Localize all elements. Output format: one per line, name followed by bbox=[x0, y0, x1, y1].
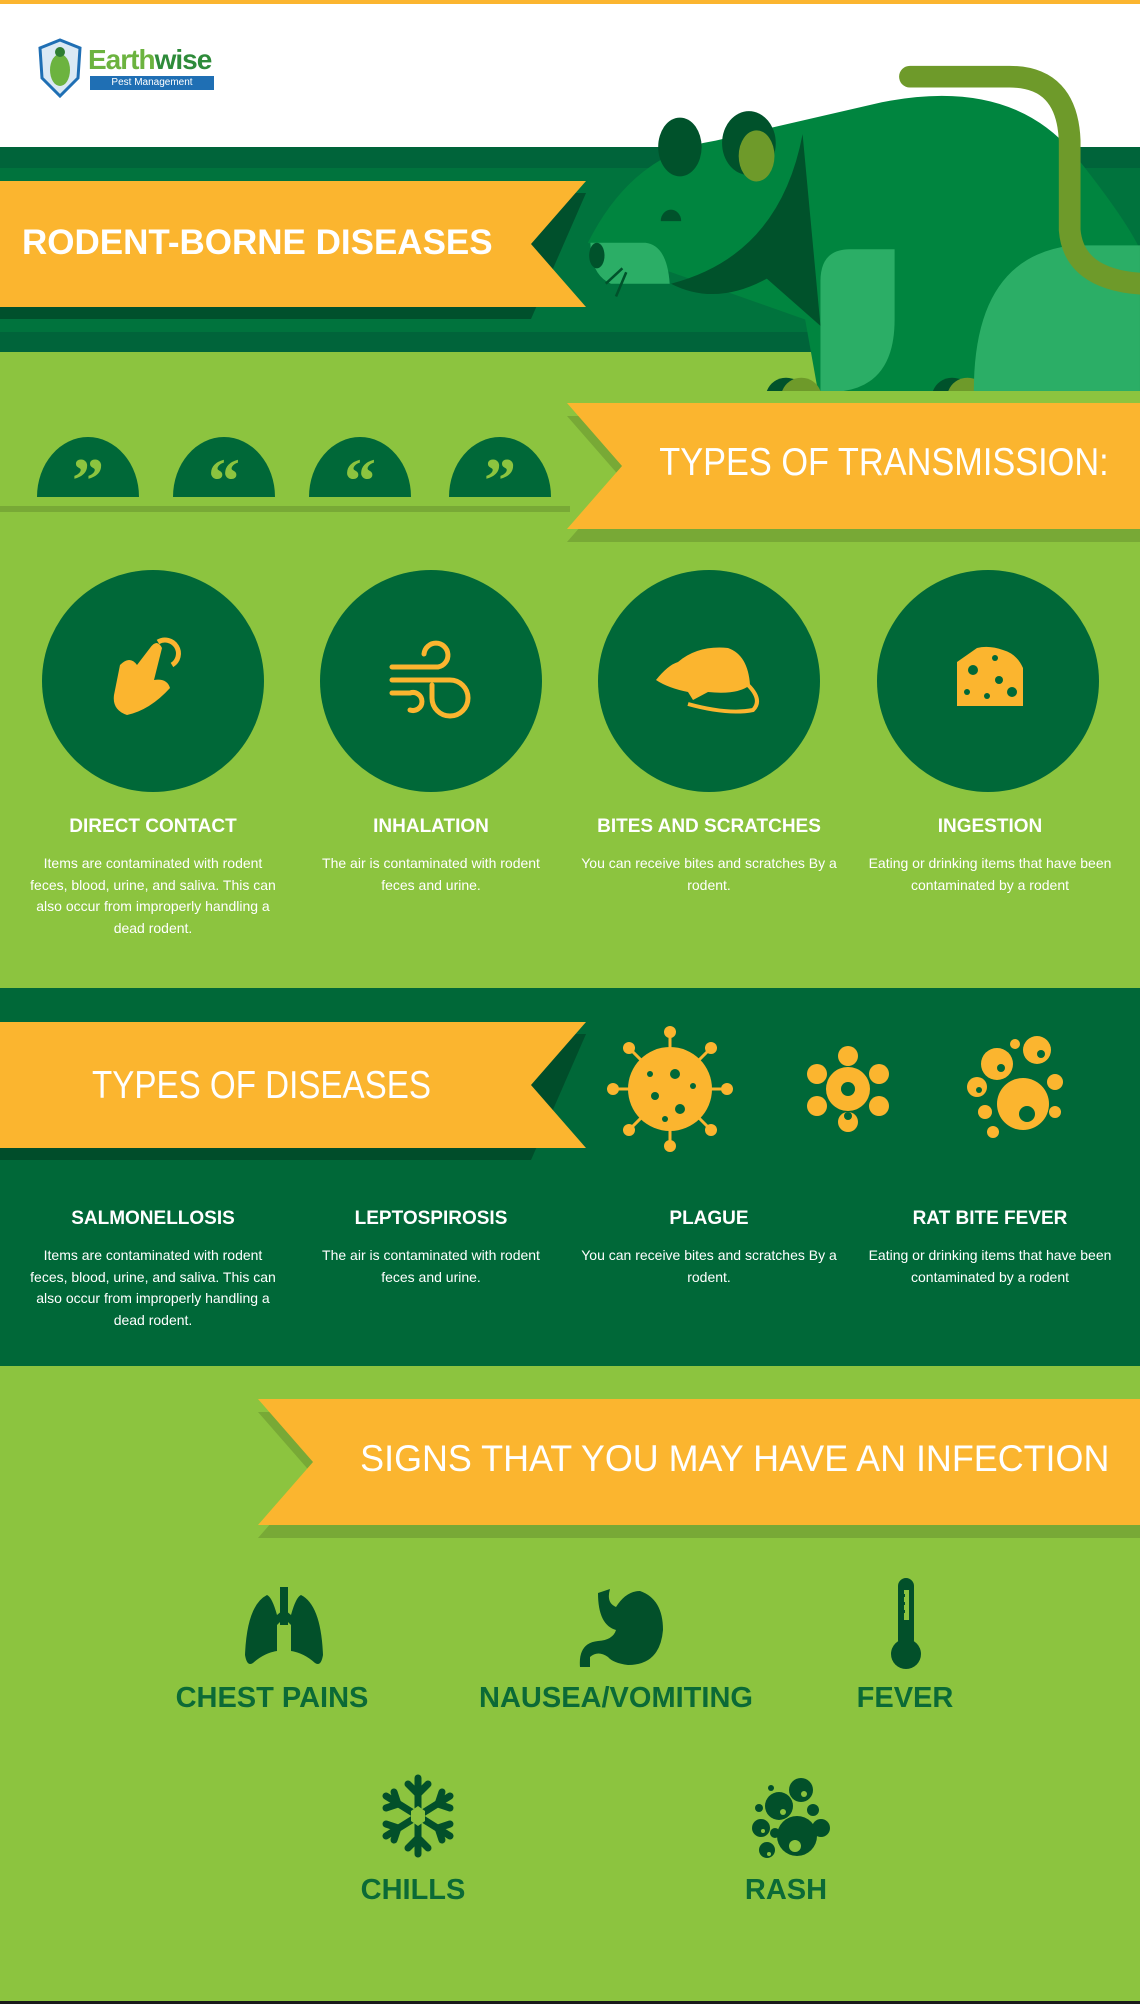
transmission: direct contact: Items are contaminated with rodent bbox=[44, 855, 262, 871]
diseases banner: TYPES OF DISEASES bbox=[92, 1064, 431, 1107]
transmission banner: TYPES OF TRANSMISSION: bbox=[660, 441, 1109, 484]
sign: rash: RASH bbox=[745, 1874, 827, 1906]
transmission: bites: rodent. bbox=[687, 877, 731, 893]
disease: leptospirosis: feces and urine. bbox=[381, 1269, 481, 1285]
disease: plague: PLAGUE bbox=[669, 1208, 749, 1229]
sign: nausea: NAUSEA/VOMITING bbox=[479, 1682, 753, 1714]
sign: nausea bbox=[479, 1589, 753, 1714]
logo bbox=[38, 38, 214, 98]
transmission: bites: You can receive bites and scratches By a bbox=[581, 855, 837, 871]
disease: salmonellosis: feces, blood, urine, and saliva. This can bbox=[30, 1269, 276, 1285]
transmission circles bbox=[42, 570, 1099, 792]
icon: virus 1 bbox=[607, 1026, 733, 1152]
disease: salmonellosis: SALMONELLOSIS bbox=[71, 1208, 235, 1229]
sign: chills bbox=[361, 1774, 465, 1906]
transmission: inhalation: feces and urine. bbox=[381, 877, 481, 893]
disease: leptospirosis: The air is contaminated with rodent bbox=[322, 1247, 540, 1263]
top white header bbox=[0, 0, 1140, 148]
disease: salmonellosis bbox=[30, 1208, 276, 1328]
disease: plague: rodent. bbox=[687, 1269, 731, 1285]
disease: salmonellosis: Items are contaminated with rodent bbox=[44, 1247, 262, 1263]
transmission: direct contact: feces, blood, urine, and saliva. This can bbox=[30, 877, 276, 893]
quote bubbles row bbox=[0, 437, 570, 512]
transmission: direct contact: DIRECT CONTACT bbox=[69, 816, 237, 837]
transmission: ingestion bbox=[869, 816, 1111, 893]
sign: chest pains: CHEST PAINS bbox=[176, 1682, 368, 1714]
disease: rat bite fever bbox=[869, 1208, 1111, 1285]
icon: hand bbox=[42, 570, 264, 792]
disease: leptospirosis: LEPTOSPIROSIS bbox=[355, 1208, 507, 1229]
transmission: direct contact: also occur from improperly handling a bbox=[36, 898, 270, 914]
signs banner bbox=[258, 1399, 1140, 1538]
transmission: direct contact bbox=[30, 816, 276, 936]
transmission: inhalation: INHALATION bbox=[373, 816, 489, 837]
disease: plague bbox=[581, 1208, 837, 1285]
sign: chest pains bbox=[176, 1587, 368, 1714]
transmission: ingestion: contaminated by a rodent bbox=[911, 877, 1069, 893]
signs banner: SIGNS THAT YOU MAY HAVE AN INFECTION bbox=[360, 1438, 1109, 1479]
disease: salmonellosis: also occur from improperly handling a bbox=[36, 1290, 270, 1306]
icon: rat bbox=[598, 570, 820, 792]
transmission: direct contact: dead rodent. bbox=[114, 920, 192, 936]
bubble 2 bbox=[173, 437, 275, 497]
disease: rat bite fever: contaminated by a rodent bbox=[911, 1269, 1069, 1285]
sign: fever: FEVER bbox=[857, 1682, 953, 1714]
disease: leptospirosis bbox=[322, 1208, 540, 1285]
diseases banner bbox=[0, 1022, 586, 1160]
transmission: inhalation: The air is contaminated with rodent bbox=[322, 855, 540, 871]
diseases section bbox=[0, 988, 1140, 1366]
title banner bbox=[0, 181, 586, 319]
sign: rash bbox=[745, 1778, 830, 1906]
icon: wind bbox=[320, 570, 542, 792]
icon: bubbles bbox=[967, 1036, 1063, 1138]
icon: virus 2 bbox=[807, 1046, 889, 1132]
disease: rat bite fever: RAT BITE FEVER bbox=[913, 1208, 1067, 1229]
icon: cheese bbox=[877, 570, 1099, 792]
sign: chills: CHILLS bbox=[361, 1874, 465, 1906]
transmission: bites: BITES AND SCRATCHES bbox=[597, 816, 821, 837]
bubble 3 bbox=[309, 437, 411, 497]
sign: fever bbox=[857, 1578, 953, 1714]
transmission: inhalation bbox=[322, 816, 540, 893]
logo: Pest Management bbox=[111, 77, 193, 88]
bubble 4 bbox=[449, 437, 551, 497]
transmission: ingestion: INGESTION bbox=[938, 816, 1042, 837]
disease: salmonellosis: dead rodent. bbox=[114, 1312, 192, 1328]
bubble 1 bbox=[37, 437, 139, 497]
bottom line bbox=[0, 2001, 1140, 2004]
disease: rat bite fever: Eating or drinking items that have been bbox=[869, 1247, 1111, 1263]
rat illustration bbox=[588, 66, 1140, 391]
transmission: ingestion: Eating or drinking items that have been bbox=[869, 855, 1111, 871]
disease: plague: You can receive bites and scratches By a bbox=[581, 1247, 837, 1263]
transmission: bites bbox=[581, 816, 837, 893]
dark green band bbox=[0, 147, 1140, 352]
transmission banner bbox=[567, 403, 1140, 542]
logo: Earthwise bbox=[88, 44, 211, 75]
title banner: RODENT-BORNE DISEASES bbox=[22, 223, 493, 262]
